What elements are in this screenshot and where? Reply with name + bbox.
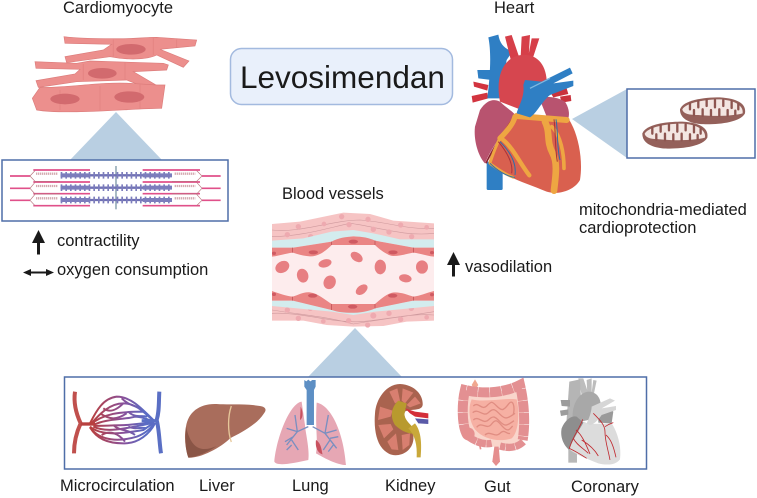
icon: blood vessel cross-section bbox=[272, 213, 434, 328]
icon: microcirculation bbox=[74, 392, 161, 453]
mitochondrion lower bbox=[642, 122, 707, 149]
label: Lung: Lung bbox=[292, 477, 329, 495]
title: Levosimendan bbox=[230, 48, 452, 104]
label: Coronary: Coronary bbox=[571, 478, 640, 496]
icon: coronary heart bbox=[560, 378, 620, 465]
label: Microcirculation: Microcirculation bbox=[60, 477, 175, 495]
Z disc bbox=[114, 166, 118, 209]
icon: lung bbox=[274, 380, 346, 465]
title: Levosimendan: Levosimendan bbox=[240, 59, 445, 95]
panel: sarcomere bbox=[2, 160, 228, 221]
panel: mitochondria bbox=[627, 89, 755, 158]
icon: double arrow oxygen bbox=[23, 269, 54, 276]
label: mitochondria-mediated cardioprotection: mitochondria-mediated bbox=[579, 201, 747, 219]
label: Liver: Liver bbox=[199, 477, 235, 495]
zoom triangle: heart to mitochondria bbox=[572, 89, 627, 158]
zoom triangle: cardiomyocyte bbox=[70, 112, 162, 160]
icon: anatomical heart bbox=[472, 35, 581, 193]
label: contractility: contractility bbox=[57, 232, 140, 250]
icon: up arrow vasodilation bbox=[447, 252, 460, 276]
heading: Blood vessels: Blood vessels bbox=[282, 185, 384, 203]
icon: gut bbox=[462, 379, 524, 466]
icon: kidney bbox=[375, 384, 428, 457]
label: mitochondria-mediated cardioprotection bbox=[579, 201, 747, 237]
icon: up arrow contractility bbox=[32, 230, 45, 254]
label: Gut: Gut bbox=[484, 478, 511, 496]
mitochondrion upper bbox=[680, 97, 745, 124]
label: oxygen consumption: oxygen consumption bbox=[57, 261, 208, 279]
label: mitochondria-mediated cardioprotection: cardioprotection bbox=[579, 219, 696, 237]
zoom triangle: blood vessels to organs bbox=[308, 328, 402, 377]
label: Kidney: Kidney bbox=[385, 477, 436, 495]
label: vasodilation: vasodilation bbox=[465, 258, 552, 276]
icon: cardiomyocyte cells bbox=[32, 37, 197, 112]
icon: liver bbox=[185, 404, 266, 458]
panel: organs bbox=[64, 377, 646, 469]
red blood cells bbox=[273, 250, 428, 297]
